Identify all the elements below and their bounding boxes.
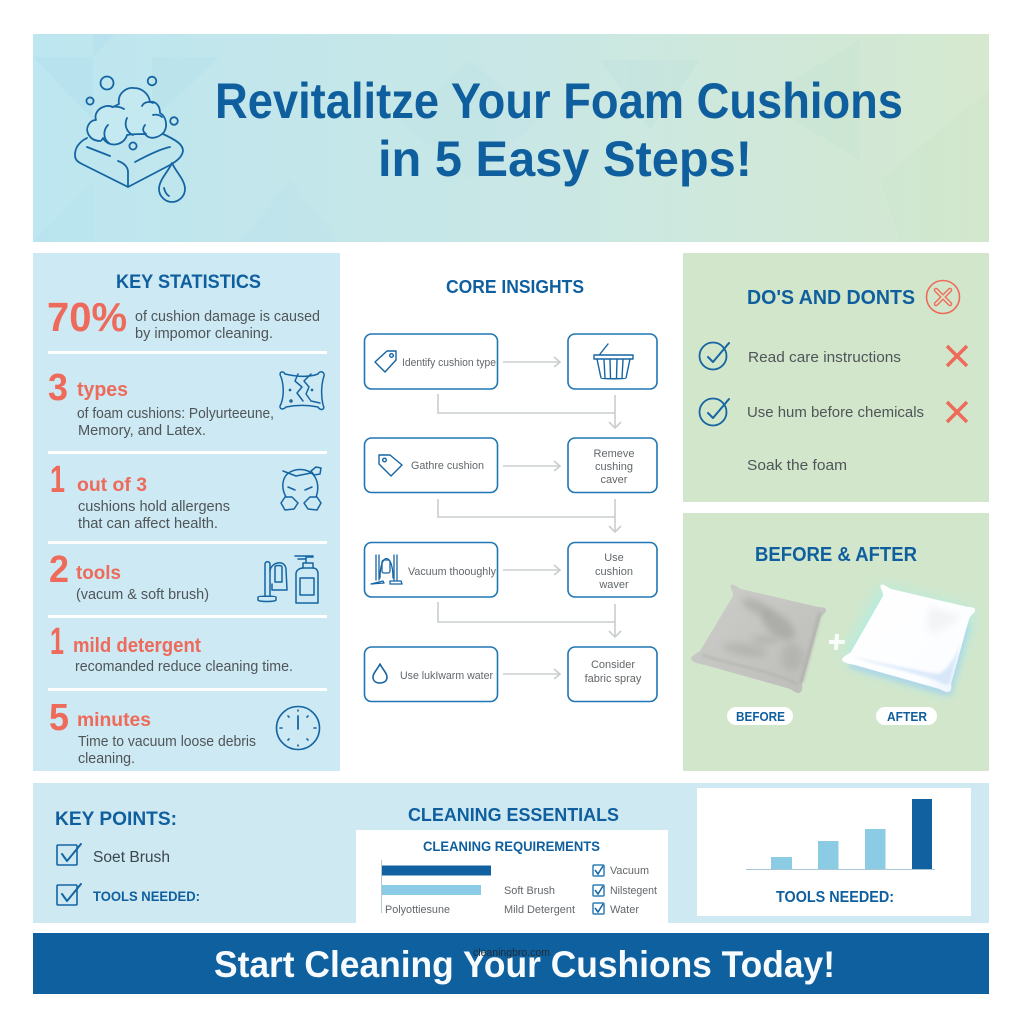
icon: sneezing face [281, 467, 321, 510]
flow row 2: caver [601, 474, 628, 486]
flow row 2 [364, 438, 657, 492]
checklist item: soft brush: Soet Brush [93, 849, 170, 866]
flow row 2: Remeve [594, 448, 634, 460]
icon: vacuums [371, 555, 402, 584]
checklist: requirements: Vacuum [610, 865, 649, 877]
icon: tag [379, 455, 402, 476]
stat: 3 types: types [77, 379, 128, 401]
checklist item: soft brush [57, 844, 170, 866]
stat: 70%: by impomor cleaning. [135, 326, 273, 342]
horizontal bar chart: Mild Detergent [504, 904, 575, 916]
panel: do's and donts [683, 253, 989, 502]
stat: 1 out of 3: that can affect health. [78, 516, 218, 532]
panel: before and after [683, 513, 989, 771]
stat: 1 out of 3: out of 3 [77, 475, 147, 496]
stat: 70%: 70% [47, 294, 127, 340]
icon: water drop [373, 664, 387, 683]
flow row 2: cushing [595, 461, 633, 473]
connector 3 [438, 602, 621, 637]
icon: cross in circle [926, 280, 960, 314]
stat: 70%: of cushion damage is caused [135, 309, 320, 325]
flow row 1: Identify cushion type [402, 357, 496, 369]
horizontal bar chart [381, 860, 575, 916]
stat: 3 types: 3 [48, 367, 68, 409]
panel: key statistics [33, 253, 340, 771]
item: read care instructions [700, 342, 967, 370]
stat: 1 out of 3: 1 [50, 459, 65, 501]
call to action banner [33, 933, 989, 994]
panel: bottom strip [33, 783, 989, 933]
flow row 2: Gathre cushion [411, 460, 484, 472]
stat: 5 minutes: minutes [77, 710, 151, 731]
label: before: BEFORE [736, 709, 785, 724]
heading: core insights: CORE INSIGHTS [446, 277, 584, 297]
item: soak the foam: Soak the foam [747, 457, 847, 474]
flow row 4: Use lukIwarm water [400, 670, 493, 682]
heading: cleaning essentials: CLEANING ESSENTIALS [408, 804, 619, 825]
icon: clock [276, 706, 320, 750]
call to action banner: Start Cleaning Your Cushions Today! [214, 944, 835, 985]
title: Revitalitze Your Foam Cushions [215, 73, 903, 129]
title: in 5 Easy Steps! [378, 131, 752, 187]
stat: 1 mild detergent [50, 621, 293, 675]
stat: 2 tools [49, 549, 318, 603]
flow row 3: Use [604, 552, 624, 564]
stat: 2 tools: (vacum & soft brush) [76, 587, 209, 603]
heading: before and after: BEFORE & AFTER [755, 544, 918, 566]
stat: 3 types: of foam cushions: Polyurteeune, [77, 406, 274, 422]
stat: 5 minutes: 5 [49, 697, 69, 739]
checklist item: tools needed [57, 884, 200, 905]
icon: foam cushion with suds [75, 76, 185, 202]
checklist item: tools needed: TOOLS NEEDED: [93, 888, 200, 904]
checklist: requirements: Water [610, 904, 639, 916]
watermark: cleaningbro.com [473, 947, 550, 959]
stat: 3 types: Memory, and Latex. [78, 423, 206, 439]
icon: plus sign [829, 634, 845, 650]
icon: tag [375, 351, 396, 372]
icon: basket [594, 344, 633, 379]
connector 2 [438, 499, 621, 532]
subheading: cleaning requirements: CLEANING REQUIREMENTS [423, 838, 600, 854]
item: use hum before chemicals [700, 398, 967, 426]
stat: 3 types [48, 367, 324, 439]
stat: 5 minutes [49, 697, 320, 767]
stat: 5 minutes: Time to vacuum loose debris [78, 734, 256, 750]
illustration: dirty cushion [691, 584, 826, 693]
flow row 4: Consider [591, 659, 635, 671]
connector 1 [438, 394, 621, 428]
flow row 4: fabric spray [585, 673, 642, 685]
icon: vacuum and spray bottle [258, 556, 318, 603]
heading: key points: KEY POINTS: [55, 809, 177, 830]
item: read care instructions: Read care instructions [748, 349, 901, 366]
label: after [876, 707, 937, 725]
stat: 1 mild detergent: mild detergent [73, 635, 201, 657]
stat: 1 out of 3 [50, 459, 321, 532]
card: cleaning requirements [356, 830, 668, 933]
card: bar chart [697, 788, 971, 916]
stat: 2 tools: 2 [49, 549, 69, 591]
stat: 2 tools: tools [76, 563, 121, 584]
icon: torn cushion [280, 372, 324, 409]
checklist: requirements [593, 865, 657, 916]
stat: 1 mild detergent: recomanded reduce cleaning time. [75, 659, 293, 675]
stat: 1 mild detergent: 1 [50, 621, 64, 663]
heading: do's and donts: DO'S AND DONTS [747, 287, 915, 309]
flow row 3 [364, 542, 657, 597]
label: after: AFTER [887, 709, 928, 724]
illustration: clean cushion [842, 584, 975, 692]
stat: 5 minutes: cleaning. [78, 751, 135, 767]
flow row 3: Vacuum thooughly [408, 566, 496, 578]
flow row 3: cushion [595, 566, 633, 578]
heading: key statistics: KEY STATISTICS [116, 272, 261, 293]
panel: core insights [364, 277, 657, 702]
flow row 3: waver [598, 579, 629, 591]
flow row 4 [364, 647, 657, 702]
flow row 1 [364, 334, 657, 389]
stat: 70% [47, 294, 320, 342]
label: before [727, 707, 793, 725]
checklist: requirements: Nilstegent [610, 885, 657, 897]
chart caption: TOOLS NEEDED: [776, 889, 894, 906]
header banner [33, 34, 989, 242]
stat: 1 out of 3: cushions hold allergens [78, 499, 230, 515]
horizontal bar chart: Soft Brush [504, 885, 555, 897]
horizontal bar chart: Polyottiesune [385, 904, 450, 916]
column chart [746, 799, 935, 870]
item: use hum before chemicals: Use hum before chemicals [747, 404, 924, 421]
title [215, 73, 903, 187]
